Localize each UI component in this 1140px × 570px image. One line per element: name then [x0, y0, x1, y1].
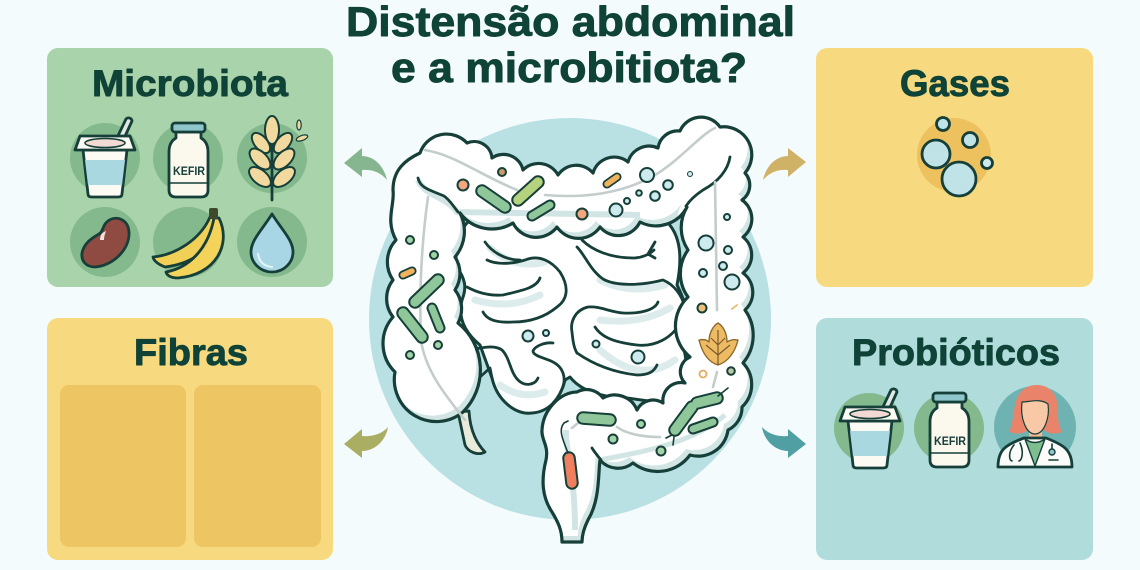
panel: probioticos: [816, 318, 1093, 560]
arrow: to gases: [763, 148, 806, 180]
fibras left box: [60, 385, 186, 547]
icon: kefir bottle: KEFIR: [934, 434, 966, 448]
icon: bubbles: [917, 118, 992, 196]
icon: water drop: [237, 207, 307, 277]
colon inner lines: [418, 178, 458, 212]
colon: [379, 111, 753, 542]
title: [346, 0, 795, 91]
heading: gases: Gases: [900, 63, 1010, 104]
panel: gases: [816, 48, 1093, 287]
colon grey lines: [425, 150, 517, 190]
icon: kefir bottle: KEFIR: [173, 164, 205, 178]
arrow: to fibras: [344, 427, 388, 458]
icon: kefir bottle: [153, 123, 223, 197]
arrow: to probioticos: [762, 427, 806, 458]
central circle: [369, 118, 771, 520]
icon: kefir bottle: [914, 393, 984, 467]
panel: microbiota: [47, 48, 333, 287]
icon: doctor: [994, 385, 1076, 468]
heading: probioticos: Probióticos: [852, 332, 1060, 373]
fibre leaf: [699, 305, 738, 365]
icon: bean: [70, 207, 140, 277]
heading: fibras: Fibras: [134, 332, 248, 373]
title: e a microbitiota?: [391, 44, 747, 91]
icon: yogurt: [834, 389, 904, 468]
icon: banana: [153, 207, 223, 278]
heading: microbiota: Microbiota: [92, 63, 288, 104]
arrow: to microbiota: [344, 148, 387, 180]
panel: fibras: [47, 318, 333, 560]
particles and gas bubbles: [406, 168, 740, 456]
intestine illustration: [379, 111, 753, 542]
icon: wheat: [237, 116, 308, 200]
icon: yogurt: [70, 118, 140, 197]
fibras right box: [194, 385, 321, 547]
small intestine: [456, 216, 687, 413]
bacteria: [403, 177, 728, 483]
appendix: [458, 411, 485, 454]
